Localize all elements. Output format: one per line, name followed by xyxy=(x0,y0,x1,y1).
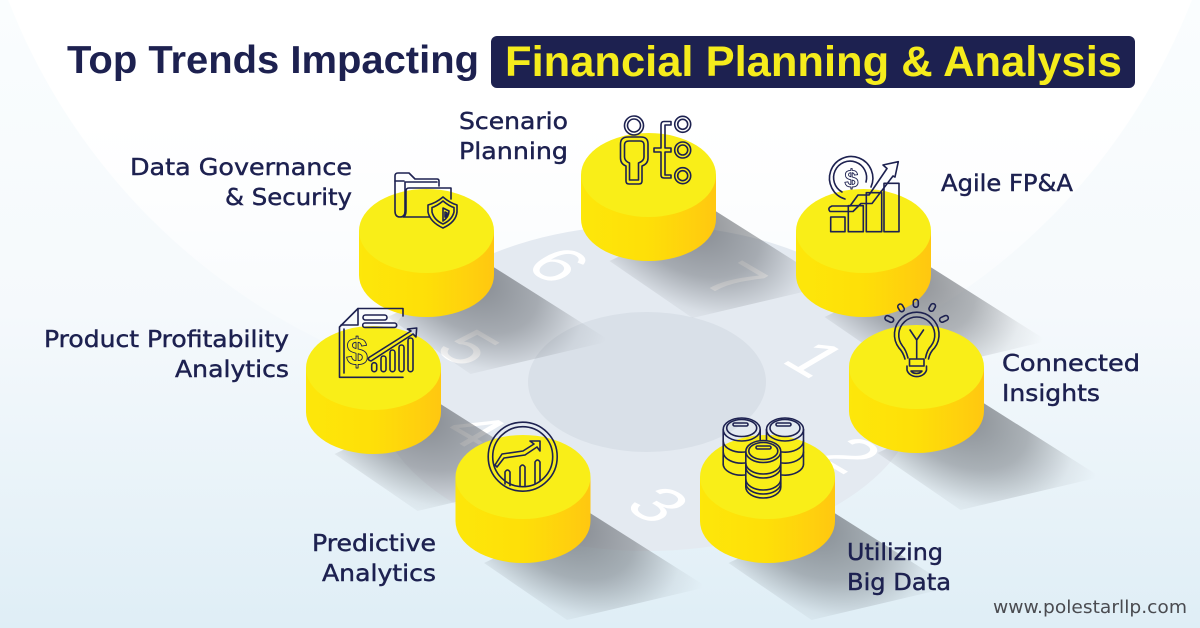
label xyxy=(847,540,951,596)
website url: www.polestarllp.com xyxy=(993,597,1187,618)
icon: circular growth chart xyxy=(488,422,557,491)
central disc xyxy=(374,225,920,551)
step numbers: 2 xyxy=(801,427,898,484)
icon: dollar coin with growth bars xyxy=(829,156,899,232)
label: Agile FP&A xyxy=(941,171,1073,197)
step numbers: 6 xyxy=(509,237,606,294)
label: Connected xyxy=(1002,351,1140,377)
icon: person and branching options xyxy=(620,116,691,184)
label: Analytics xyxy=(322,561,436,587)
cylinder xyxy=(359,189,494,317)
cylinder xyxy=(849,325,984,453)
label: Data Governance xyxy=(130,155,352,181)
step numbers: 7 xyxy=(686,252,783,309)
icon: light bulb xyxy=(884,299,949,377)
panel: utilizing big data xyxy=(700,418,951,596)
label: & Security xyxy=(225,185,352,211)
cylinder xyxy=(581,133,716,261)
cylinder xyxy=(456,435,590,563)
icon: database coin stacks xyxy=(723,418,804,498)
step numbers: 4 xyxy=(426,402,523,459)
label xyxy=(44,327,289,383)
step numbers: 1 xyxy=(766,331,863,388)
label: Big Data xyxy=(847,570,951,596)
label: Planning xyxy=(459,139,568,165)
panel: agile FP&A xyxy=(796,156,1073,317)
label: Predictive xyxy=(312,531,436,557)
label: Analytics xyxy=(175,357,289,383)
icon: folder with shield xyxy=(395,173,457,228)
title: plain part: Top Trends Impacting xyxy=(67,39,479,82)
icon: report with dollar and rising bars: $ xyxy=(346,331,368,374)
step numbers: 5 xyxy=(419,320,516,377)
cylinder xyxy=(796,189,931,317)
label xyxy=(312,531,436,587)
panel: data governance and security xyxy=(130,155,494,317)
cylinder xyxy=(306,326,441,454)
label: Utilizing xyxy=(847,540,943,566)
label: Insights xyxy=(1002,381,1100,407)
cylinder xyxy=(700,435,835,563)
label xyxy=(1002,351,1140,407)
title: highlighted badge: Financial Planning & Analysis xyxy=(505,39,1122,86)
panel: product profitability analytics xyxy=(44,308,441,454)
cast shadows xyxy=(334,211,1100,620)
title xyxy=(67,36,1135,88)
panel: scenario planning xyxy=(459,109,716,261)
icon: report with dollar and rising bars xyxy=(340,308,417,377)
step numbers xyxy=(419,237,898,534)
label xyxy=(459,109,568,165)
panel: predictive analytics xyxy=(312,422,590,587)
step numbers: 3 xyxy=(609,477,706,534)
panel: connected insights xyxy=(849,299,1140,453)
label: Product Profitability xyxy=(44,327,289,353)
label: Scenario xyxy=(459,109,568,135)
label xyxy=(130,155,352,211)
icon: dollar coin with growth bars: $ xyxy=(845,165,859,193)
